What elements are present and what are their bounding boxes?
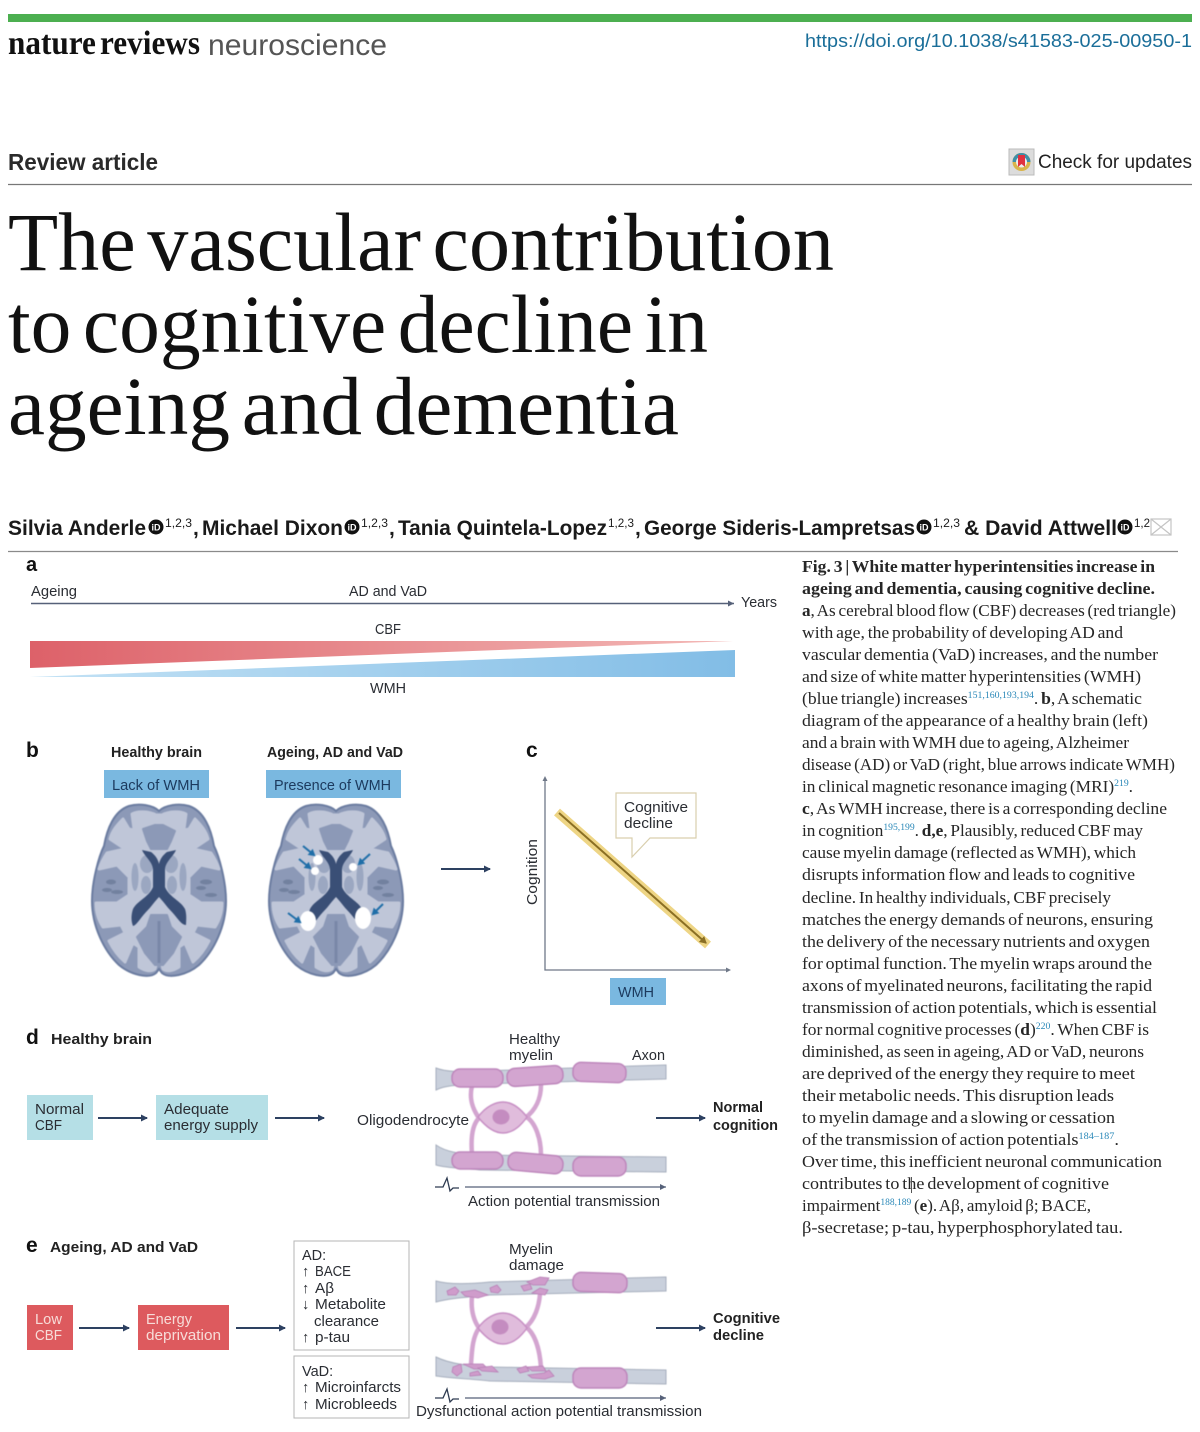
icon: check for updates (1009, 149, 1034, 175)
panel letter c: c (526, 739, 538, 762)
figure caption: ageing and dementia, causing cognitive decline. (802, 579, 1155, 598)
box AD factors: BACE (315, 1264, 351, 1280)
damaged myelin fragments (447, 1277, 554, 1379)
axons (436, 1277, 666, 1302)
figure caption: . (1129, 777, 1133, 796)
outcome cognitive decline (713, 1311, 780, 1344)
figure caption: 188,189 (880, 1198, 911, 1208)
tag lack of WMH: Lack of WMH (112, 777, 200, 794)
decline arrow (559, 813, 706, 943)
authors: 1,2 (1134, 516, 1150, 530)
box adequate energy supply: Adequate (164, 1102, 229, 1118)
figure caption: disease (AD) or VaD (right, blue arrows indicate WMH) (802, 755, 1175, 774)
box adequate energy supply: energy supply (164, 1118, 259, 1134)
check for updates label: Check for updates (1038, 152, 1192, 173)
callout cognitive decline: Cognitive (624, 800, 688, 816)
outcome cognitive decline: Cognitive (713, 1311, 780, 1327)
spike trace (435, 1178, 459, 1191)
WMH label: WMH (370, 681, 406, 697)
figure caption: in clinical magnetic resonance imaging (MRI) (802, 777, 1108, 796)
figure caption: c, As WMH increase, there is a corresponding decline (802, 799, 1167, 818)
panel c: cognition chart (525, 739, 731, 1005)
tag lack of WMH (104, 770, 209, 798)
figure caption: impairment (802, 1196, 880, 1215)
figure caption: decline. In healthy individuals, CBF precisely (802, 888, 1112, 907)
transmission arrow (465, 1186, 666, 1188)
box AD factors: Aβ (315, 1281, 334, 1297)
journal header bar (8, 14, 1192, 22)
box normal CBF: CBF (35, 1118, 62, 1134)
figure caption: to myelin damage and a slowing or cessation (802, 1108, 1116, 1127)
dysfunctional transmission arrow (465, 1397, 666, 1399)
dysfunctional transmission label: Dysfunctional action potential transmission (416, 1404, 702, 1420)
outcome cognitive decline: decline (713, 1328, 764, 1344)
box VaD factors: VaD: (302, 1364, 333, 1380)
processes (471, 1085, 541, 1155)
transmission label: Action potential transmission (468, 1194, 660, 1210)
myelin damage label: Myelin (509, 1242, 553, 1258)
title: The vascular contribution (8, 196, 834, 288)
figure caption: d,e, Plausibly, reduced CBF may (922, 821, 1140, 840)
authors: , (389, 517, 395, 540)
authors (8, 516, 1150, 540)
panel b: brains (26, 739, 490, 976)
callout cognitive decline (616, 793, 696, 857)
outcome normal cognition (713, 1100, 778, 1134)
panel a: timeline and gradients (26, 554, 777, 697)
damaged neuron illustration (436, 1272, 666, 1388)
tag presence of WMH: Presence of WMH (274, 777, 391, 794)
journal name: nature reviews (8, 25, 200, 62)
figure caption: . When CBF is (1050, 1020, 1149, 1039)
figure caption: b, A schematic (1041, 689, 1139, 708)
WMH tag: WMH (618, 985, 654, 1001)
authors: 1,2,3 (608, 516, 634, 530)
axes (545, 778, 729, 970)
outcome normal cognition: Normal (713, 1100, 763, 1116)
box AD factors: p-tau (315, 1330, 350, 1346)
authors: iD (152, 522, 161, 532)
figure caption: their metabolic needs. This disruption leads (802, 1086, 1114, 1105)
WMH tag (610, 978, 666, 1005)
figure caption: in cognition (802, 821, 882, 840)
arrow (236, 1327, 285, 1329)
authors: , (635, 517, 641, 540)
authors: & David Attwell (964, 517, 1117, 540)
figure caption: 184–187 (1079, 1132, 1115, 1142)
heading ageing: Ageing, AD and VaD (267, 745, 403, 761)
axons (436, 1065, 666, 1090)
box AD factors: ↑ (302, 1330, 309, 1346)
figure caption: with age, the probability of developing AD and (802, 623, 1124, 642)
figure caption: contributes to the development of cognitive (802, 1174, 1109, 1193)
figure caption: disrupts information flow and leads to cognitive (802, 865, 1135, 884)
figure caption: 195,199 (883, 823, 915, 833)
healthy neuron illustration (436, 1062, 666, 1176)
figure caption: diminished, as seen in ageing, AD or VaD, neurons (802, 1042, 1144, 1061)
figure caption: vascular dementia (VaD) increases, and the number (802, 645, 1158, 664)
heading d: Healthy brain (51, 1031, 152, 1048)
figure caption: a, As cerebral blood flow (CBF) decreases (red triangle) (802, 601, 1176, 620)
healthy myelin label: Healthy (509, 1032, 561, 1048)
figure caption: Fig. 3 | White matter hyperintensities increase in (802, 557, 1156, 576)
figure caption: e). Aβ, amyloid β; BACE, (920, 1196, 1091, 1215)
box AD factors: Metabolite (315, 1297, 386, 1313)
tag presence of WMH (266, 770, 401, 798)
callout cognitive decline: decline (624, 816, 673, 832)
figure caption: diagram of the appearance of a healthy brain (left) (802, 711, 1148, 730)
ageing label: Ageing (31, 584, 77, 600)
box low CBF: CBF (35, 1328, 62, 1344)
box energy deprivation (138, 1305, 229, 1350)
arrow to panel c (441, 868, 490, 870)
box AD factors: AD: (302, 1248, 326, 1264)
spike trace (435, 1389, 459, 1402)
arrow (79, 1327, 129, 1329)
box AD factors (294, 1241, 409, 1350)
box VaD factors: Microbleeds (315, 1397, 397, 1413)
decline band (557, 812, 708, 945)
panel d: healthy brain pathway (26, 1026, 778, 1210)
heading healthy brain: Healthy brain (111, 745, 202, 761)
authors: 1,2,3 (361, 516, 388, 530)
box AD factors: ↑ (302, 1264, 309, 1280)
box energy deprivation: Energy (146, 1312, 193, 1328)
healthy myelin label (509, 1032, 561, 1064)
cell body (478, 1102, 527, 1133)
outcome normal cognition: cognition (713, 1118, 778, 1134)
panel letter e: e (26, 1234, 38, 1257)
DOI link: https://doi.org/10.1038/s41583-025-00950-1 (805, 31, 1192, 51)
journal name: neuroscience (208, 29, 387, 62)
box normal CBF (27, 1095, 93, 1140)
figure caption: (blue triangle) increases (802, 689, 962, 708)
myelin damage label: damage (509, 1258, 564, 1274)
authors: iD (348, 522, 357, 532)
box AD factors: ↓ (302, 1297, 309, 1313)
box VaD factors: ↑ (302, 1397, 309, 1413)
arrow (656, 1327, 705, 1329)
myelin damage label (509, 1242, 564, 1274)
figure caption: of the transmission of action potentials (802, 1130, 1058, 1149)
title: to cognitive decline in (8, 278, 708, 370)
figure caption: cause myelin damage (reflected as WMH), which (802, 843, 1137, 862)
authors: 1,2,3 (933, 516, 960, 530)
arrow (275, 1117, 324, 1119)
figure caption: matches the energy demands of neurons, ensuring (802, 910, 1154, 929)
figure caption: the delivery of the necessary nutrients and oxygen (802, 932, 1151, 951)
figure caption: for normal cognitive processes ( d) (802, 1020, 1036, 1039)
figure caption: . (1114, 1130, 1119, 1149)
journal name (8, 25, 387, 62)
article type: Review article (8, 149, 158, 175)
panel letter b: b (26, 739, 39, 762)
figure caption: ( (911, 1196, 920, 1215)
figure caption: and a brain with WMH due to ageing, Alzheimer (802, 733, 1129, 752)
figure caption: 151,160,193,194 (968, 691, 1034, 701)
box AD factors: clearance (314, 1314, 379, 1330)
figure caption (802, 557, 1176, 1237)
figure caption: β-secretase; p-tau, hyperphosphorylated tau. (802, 1218, 1123, 1237)
time axis arrow (31, 602, 734, 604)
figure caption: are deprived of the energy they require to meet (802, 1064, 1135, 1083)
figure caption: and size of white matter hyperintensities (WMH) (802, 667, 1141, 686)
box AD factors: ↑ (302, 1281, 309, 1297)
box low CBF: Low (35, 1312, 63, 1328)
myelin sheaths (452, 1069, 503, 1087)
figure caption: . (915, 821, 922, 840)
figure caption: transmission of action potentials, which is essential (802, 998, 1157, 1017)
intact myelin (573, 1272, 627, 1293)
figure caption: 220 (1036, 1022, 1051, 1032)
title: ageing and dementia (8, 360, 679, 452)
arrow (656, 1117, 705, 1119)
authors: 1,2,3 (165, 516, 192, 530)
figure caption: axons of myelinated neurons, facilitating the rapid (802, 976, 1153, 995)
brain with WMH illustration (269, 805, 403, 976)
figure caption: 219 (1114, 779, 1129, 789)
authors: George Sideris-Lampretsas (644, 517, 915, 540)
heading e: Ageing, AD and VaD (50, 1239, 198, 1256)
title (8, 196, 834, 452)
processes (471, 1294, 541, 1368)
box VaD factors: ↑ (302, 1380, 309, 1396)
panel letter a: a (26, 554, 38, 576)
healthy myelin label: myelin (509, 1048, 553, 1064)
authors: , (193, 517, 199, 540)
authors: Tania Quintela-Lopez (398, 517, 607, 540)
icon: envelope (1151, 519, 1171, 535)
authors: iD (1120, 522, 1130, 532)
figure caption: Over time, this inefficient neuronal communication (802, 1152, 1163, 1171)
years label: Years (741, 595, 777, 611)
authors: Silvia Anderle (8, 517, 146, 540)
healthy brain illustration (92, 805, 226, 976)
arrow (98, 1117, 147, 1119)
panel letter d: d (26, 1026, 39, 1049)
oligodendrocyte label: Oligodendrocyte (357, 1113, 469, 1129)
panel e: ageing pathway (26, 1234, 780, 1420)
box low CBF (27, 1305, 73, 1350)
box VaD factors (294, 1356, 409, 1418)
figure caption: . (1034, 689, 1041, 708)
box normal CBF: Normal (35, 1102, 84, 1118)
authors: Michael Dixon (202, 517, 343, 540)
CBF label: CBF (375, 622, 401, 638)
box VaD factors: Microinfarcts (315, 1380, 401, 1396)
figure caption: for optimal function. The myelin wraps around the (802, 954, 1152, 973)
cell body (478, 1313, 527, 1344)
red CBF triangle (30, 641, 733, 668)
authors: iD (920, 522, 929, 532)
blue WMH triangle (30, 650, 735, 677)
box energy deprivation: deprivation (146, 1328, 221, 1344)
AD and VaD label: AD and VaD (349, 584, 427, 600)
WMH lesions (300, 855, 371, 931)
blue arrows (288, 846, 383, 922)
box adequate energy supply (156, 1095, 268, 1140)
cognition axis label: Cognition (525, 839, 541, 905)
axon label: Axon (632, 1048, 665, 1064)
